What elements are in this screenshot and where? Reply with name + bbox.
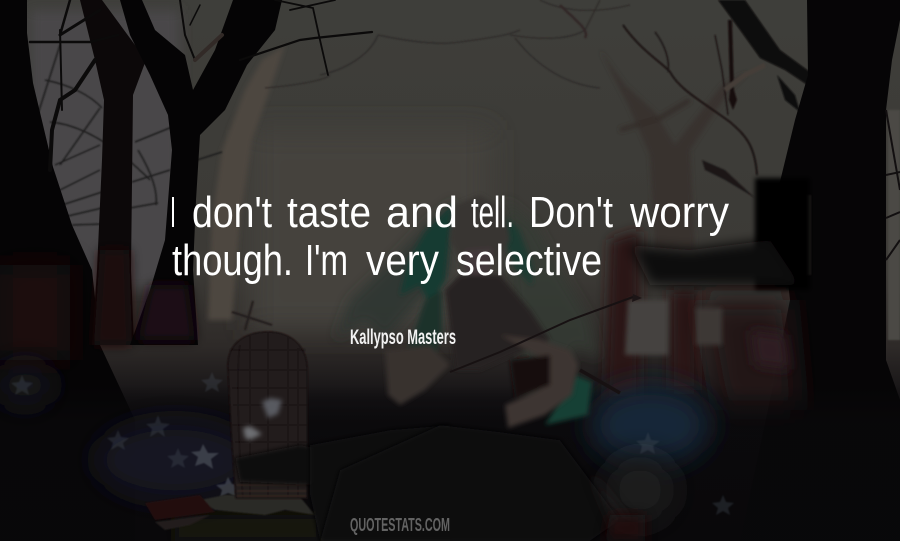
quote text: though.	[172, 236, 293, 285]
quote text: Don't	[529, 188, 613, 237]
blurred red cross	[605, 178, 810, 410]
thin background branches	[265, 0, 630, 88]
lower ground darkness	[0, 385, 900, 541]
author attribution: Kallypso Masters	[350, 326, 456, 349]
quote text: worry	[629, 188, 729, 237]
violinist: green hair	[335, 200, 598, 410]
right tree branches	[623, 0, 812, 198]
quote text: and	[386, 188, 458, 237]
main left tree	[120, 0, 282, 345]
pale background trees	[208, 45, 748, 320]
dark left trunk	[0, 0, 135, 541]
violin bow	[450, 294, 642, 393]
quote text: I'm	[305, 236, 348, 285]
violinist: body and head	[385, 195, 578, 428]
wheel spokes behind trees	[36, 45, 222, 225]
dark right trunk	[740, 0, 900, 541]
book under the cage	[145, 495, 315, 530]
quote text: don't	[192, 188, 272, 237]
quote text: tell.	[471, 188, 514, 237]
quote text: selective	[456, 236, 602, 285]
bird cage	[228, 301, 308, 498]
cage foliage shadow	[235, 425, 450, 541]
quote text: I	[170, 188, 176, 237]
left tree branches	[30, 0, 372, 170]
blue flower beds	[0, 363, 734, 525]
watermark: QUOTESTATS.COM	[350, 515, 450, 535]
quote text: very	[366, 236, 439, 285]
quote text: taste	[287, 188, 371, 237]
black feather skirt	[320, 425, 645, 541]
white birds in cage	[243, 398, 282, 440]
quote text	[170, 188, 729, 285]
dark red middle trunk	[0, 0, 146, 360]
